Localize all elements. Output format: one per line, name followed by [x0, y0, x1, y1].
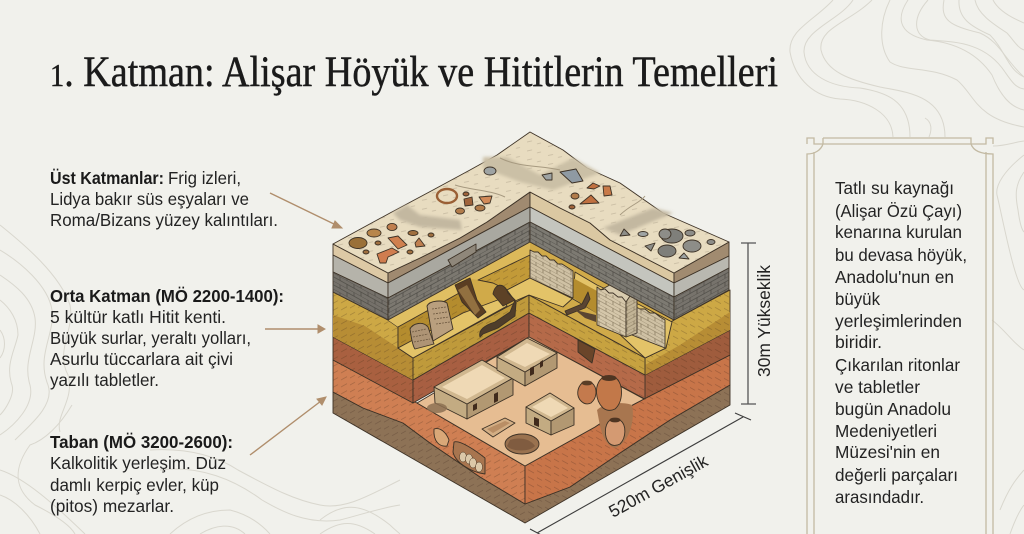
- bottom soil layers: [333, 330, 730, 523]
- width dimension: 520m Genişlik: [605, 451, 711, 521]
- text block: base layer: Taban (MÖ 3200-2600):: [50, 432, 233, 452]
- panel text: yerleşimlerinden: [835, 311, 962, 331]
- text block: middle layer: Asurlu tüccarlara ait çivi: [50, 349, 233, 369]
- brick walls and tower: [530, 250, 665, 348]
- tower: [597, 281, 637, 337]
- panel text: kenarına kurulan: [835, 222, 962, 242]
- storage jars: [578, 375, 633, 448]
- panel text: bu devasa höyük,: [835, 245, 967, 265]
- text block: base layer: damlı kerpiç evler, küp: [50, 475, 219, 495]
- house 2: [497, 338, 557, 386]
- arrow: base layer: [250, 397, 326, 455]
- text block: base layer: Kalkolitik yerleşim. Düz: [50, 453, 226, 473]
- low wall: [632, 305, 665, 348]
- stones and coins: [484, 167, 715, 259]
- text block: middle layer: Büyük surlar, yeraltı yolları,: [50, 328, 251, 348]
- contour lines: left and bottom: [0, 225, 400, 534]
- yellow middle layer: [333, 242, 730, 380]
- arrow: upper layers: [270, 193, 342, 228]
- clay tablets: [410, 301, 453, 349]
- isometric excavation block: [333, 132, 730, 523]
- panel: description frame: [807, 138, 993, 534]
- height dimension: [741, 243, 774, 404]
- house 1: [427, 360, 513, 419]
- panel text: ve tabletler: [835, 377, 920, 397]
- panel text: Anadolu'nun en: [835, 267, 954, 287]
- text block: upper layers: Frig izleri,: [168, 168, 241, 188]
- rear brick wall: [530, 250, 573, 298]
- red inner walls and floor: [413, 313, 645, 466]
- house 3: [526, 393, 574, 435]
- underground passages: [455, 278, 596, 337]
- tunnel door: [575, 335, 597, 363]
- text block: base layer: [50, 432, 233, 516]
- panel text: [835, 178, 967, 507]
- grave pit and round pit: [482, 418, 539, 454]
- panel text: arasındadır.: [835, 487, 924, 507]
- title: 1. Katman: Alişar Höyük ve Hititlerin Temelleri: [50, 49, 778, 96]
- height dimension: 30m Yükseklik: [754, 265, 774, 377]
- arrow: middle layer: [265, 325, 325, 333]
- text block: middle layer: [50, 286, 284, 390]
- panel text: biridir.: [835, 332, 882, 352]
- contour lines: top right: [790, 0, 1024, 534]
- text block: base layer: (pitos) mezarlar.: [50, 496, 174, 516]
- bronze and ceramic finds: [349, 183, 612, 263]
- text block: upper layers: Roma/Bizans yüzey kalıntıları.: [50, 210, 278, 230]
- width dimension: [530, 413, 751, 534]
- panel text: Tatlı su kaynağı: [835, 178, 954, 198]
- panel text: değerli parçaları: [835, 465, 958, 485]
- text block: upper layers: Lidya bakır süs eşyaları ve: [50, 189, 249, 209]
- text block: upper layers: Üst Katmanlar:: [50, 168, 164, 188]
- terrace base: [388, 242, 674, 358]
- upper slab: grey and tan strata: [333, 192, 729, 320]
- excavated settlement floor: [417, 337, 644, 466]
- text block: middle layer: Orta Katman (MÖ 2200-1400):: [50, 286, 284, 306]
- text block: middle layer: yazılı tabletler.: [50, 370, 159, 390]
- wall burials: [434, 429, 485, 474]
- panel text: (Alişar Özü Çayı): [835, 201, 962, 221]
- panel text: bugün Anadolu: [835, 399, 951, 419]
- top surface with artifacts: [333, 132, 729, 273]
- text block: middle layer: 5 kültür katlı Hitit kenti.: [50, 307, 226, 327]
- panel text: büyük: [835, 289, 880, 309]
- panel text: Medeniyetleri: [835, 421, 937, 441]
- text block: upper layers: [50, 168, 278, 230]
- panel text: Müzesi'nin en: [835, 442, 940, 462]
- panel text: Çıkarılan ritonlar: [835, 355, 960, 375]
